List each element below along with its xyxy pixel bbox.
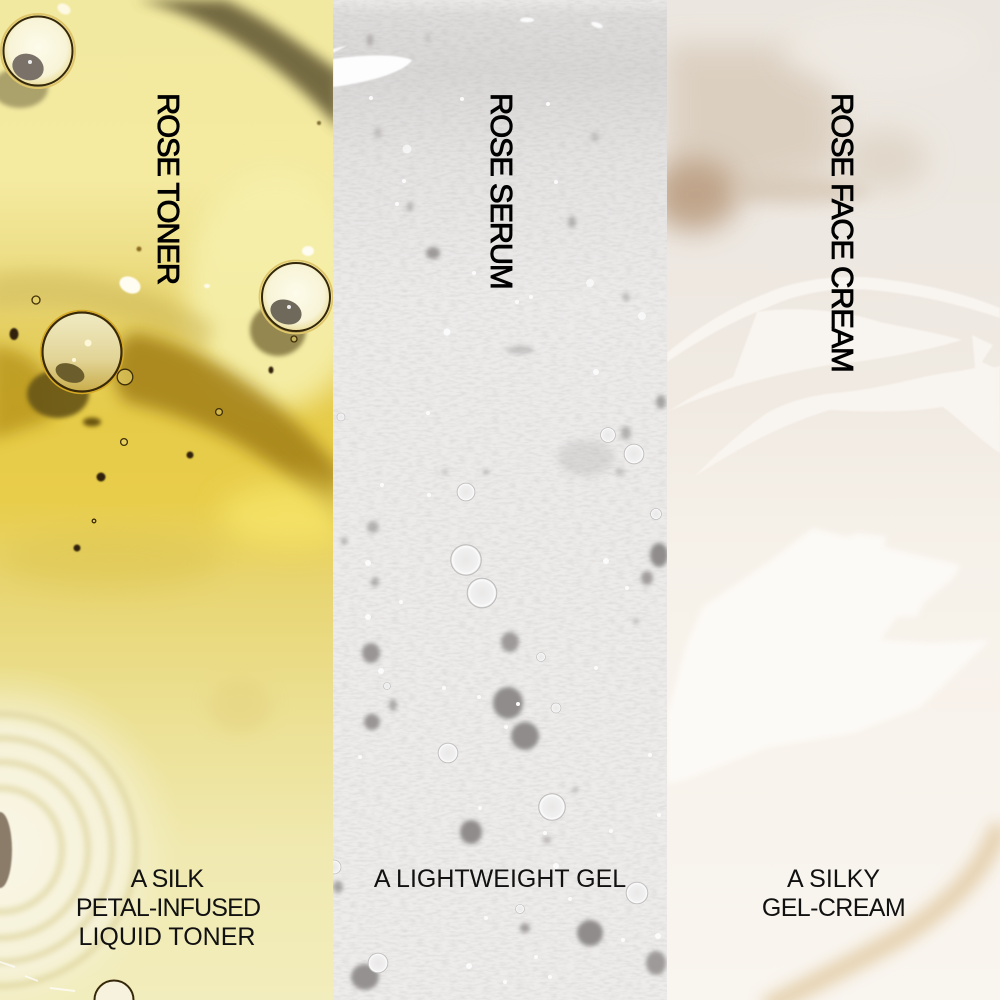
- bubble shadows: [0, 68, 306, 426]
- caption: toner: LIQUID TONER: [79, 923, 255, 951]
- gloss highlight: [333, 55, 412, 87]
- panel: rose serum texture: [327, 0, 668, 1000]
- small bubbles: [32, 296, 297, 523]
- panel: rose toner texture: [0, 0, 365, 1000]
- tan edge at bottom right: [765, 825, 1000, 1000]
- dark arc at top right: [135, 0, 340, 130]
- dark golden area at left: [0, 345, 52, 440]
- heading: rose serum: ROSE SERUM: [484, 93, 519, 288]
- caption: serum: A LIGHTWEIGHT GEL: [374, 865, 626, 893]
- concentric ripples: [0, 675, 161, 998]
- caption: cream: [762, 865, 905, 922]
- icon: bubble centre: [40, 310, 124, 394]
- caption: toner: [76, 865, 260, 951]
- heading: rose face cream: ROSE FACE CREAM: [825, 93, 860, 372]
- icon: bubble top left: [1, 14, 75, 88]
- glossy swirl highlights: [667, 277, 1000, 477]
- blurred grey specks: [333, 33, 668, 990]
- caption: cream: A SILKY: [787, 865, 880, 893]
- icon: serum bubbles: [327, 413, 662, 973]
- icon: bubble right: [260, 260, 332, 334]
- white glints: [55, 1, 314, 297]
- caption: toner: PETAL-INFUSED: [76, 894, 260, 922]
- tiny white droplets: [358, 96, 661, 984]
- gloss patch: [667, 528, 990, 783]
- icon: bubble bottom: [94, 980, 134, 1000]
- dark specks: [10, 121, 321, 552]
- caption: cream: GEL-CREAM: [762, 894, 905, 922]
- tan ripple band: [0, 271, 215, 350]
- panel: rose face cream texture: [653, 0, 1000, 1000]
- heading: rose toner: ROSE TONER: [151, 93, 186, 284]
- caption: toner: A SILK: [131, 865, 203, 893]
- dark golden ripple band: [113, 332, 340, 530]
- tan shadow at upper left: [667, 45, 840, 220]
